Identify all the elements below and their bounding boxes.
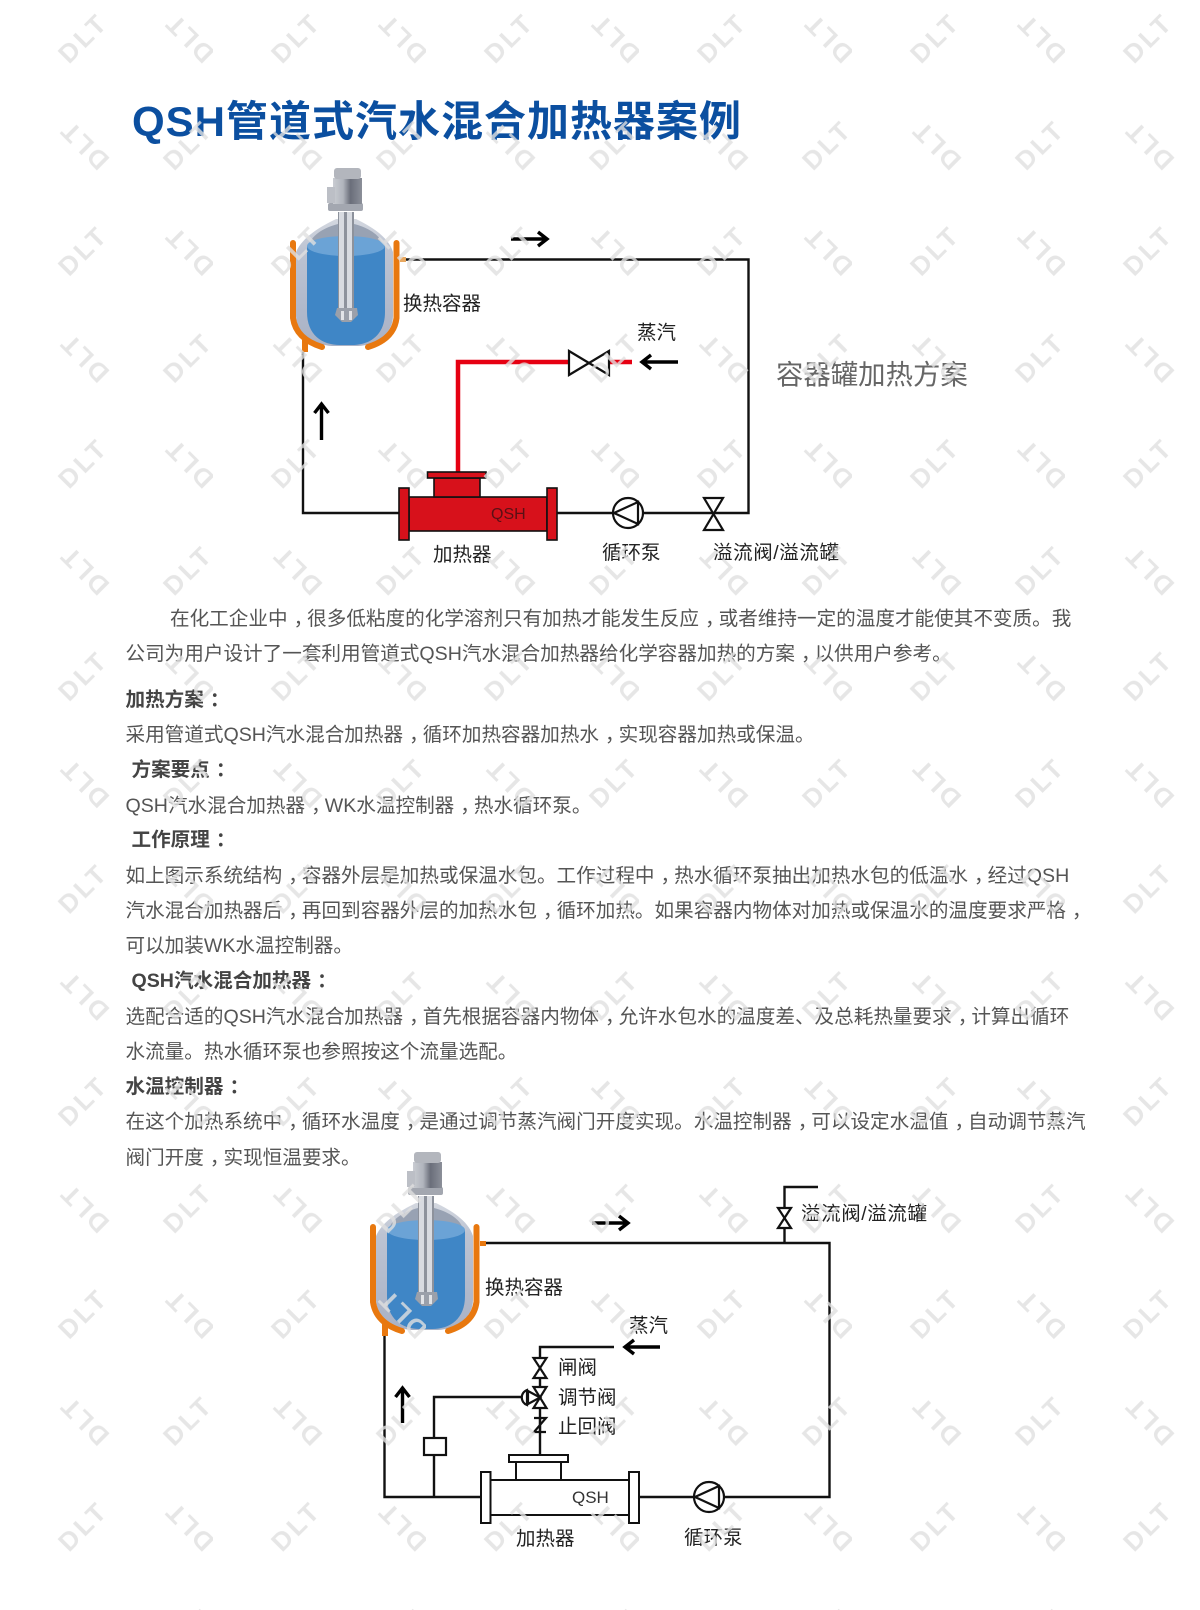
diagram: vessel heating scheme with red heater bbox=[293, 168, 839, 566]
intro paragraph bbox=[126, 608, 1071, 665]
heading: temperature controller: 水温控制器 ： bbox=[126, 1075, 249, 1098]
icon: heat exchange vessel bbox=[293, 168, 406, 352]
circulation pump bbox=[613, 498, 643, 528]
arrow: steam flow left bbox=[625, 1340, 660, 1354]
label: overflow valve: 溢流阀/溢流罐 bbox=[801, 1203, 927, 1225]
intro paragraph: 公司为用户设计了一套利用管道式QSH汽水混合加热器给化学容器加热的方案 ，以供用户参考。 bbox=[126, 643, 952, 665]
pipes: circulation loop bbox=[384, 1243, 830, 1497]
steam valve bbox=[569, 351, 609, 375]
text: QSH heater: 水流量。热水循环泵也参照按这个流量选配。 bbox=[126, 1041, 517, 1063]
heading: key points: 方案要点 ： bbox=[132, 758, 235, 781]
red steam pipe bbox=[458, 362, 632, 472]
regulating valve bbox=[522, 1387, 546, 1408]
overflow valve bbox=[778, 1208, 791, 1228]
label: check valve: 止回阀 bbox=[558, 1416, 617, 1438]
icon: heat exchange vessel bbox=[373, 1152, 486, 1336]
pipes: steam, controller and overflow lines bbox=[434, 1187, 818, 1497]
label: heater: 加热器 bbox=[516, 1528, 575, 1550]
text: QSH heater bbox=[126, 1006, 1069, 1063]
heater label QSH: QSH bbox=[572, 1488, 609, 1507]
check valve bbox=[534, 1418, 546, 1432]
heater QSH, outline bbox=[481, 1455, 639, 1523]
heater label QSH: QSH bbox=[491, 506, 526, 523]
arrow: top flow right bbox=[511, 232, 547, 246]
label: regulating valve: 调节阀 bbox=[558, 1387, 617, 1409]
text: QSH heater: 选配合适的QSH汽水混合加热器 ，首先根据容器内物体 ，允许水包水的温度差、及总耗热量要求 ，计算出循环 bbox=[126, 1006, 1069, 1028]
text: temperature controller: 阀门开度 ，实现恒温要求。 bbox=[126, 1147, 361, 1169]
text: heating scheme: 采用管道式QSH汽水混合加热器 ，循环加热容器加热水 ，实现容器加热或保温。 bbox=[126, 724, 815, 746]
text: working principle bbox=[126, 865, 1092, 957]
diagram: control scheme with temperature controller bbox=[373, 1152, 927, 1550]
label: pump: 循环泵 bbox=[684, 1527, 743, 1549]
label: gate valve: 闸阀 bbox=[558, 1357, 597, 1379]
label: overflow valve: 溢流阀/溢流罐 bbox=[713, 542, 839, 564]
text: temperature controller: 在这个加热系统中 ，循环水温度 ，是通过调节蒸汽阀门开度实现。水温控制器 ，可以设定水温值 ，自动调节蒸汽 bbox=[126, 1111, 1086, 1133]
label: heater: 加热器 bbox=[433, 544, 492, 566]
arrow: return flow up bbox=[396, 1388, 410, 1423]
text: working principle: 汽水混合加热器后 ，再回到容器外层的加热水包 ，循环加热。如果容器内物体对加热或保温水的温度要求严格 ， bbox=[126, 900, 1092, 922]
heater QSH, red bbox=[399, 472, 557, 540]
arrow: return flow up bbox=[314, 404, 328, 440]
scheme caption: 容器罐加热方案 bbox=[776, 359, 968, 390]
body text block bbox=[126, 608, 1092, 1169]
title: QSH管道式汽水混合加热器案例 bbox=[132, 98, 742, 145]
label: steam: 蒸汽 bbox=[629, 1315, 668, 1337]
label: vessel: 换热容器 bbox=[403, 293, 481, 315]
label: steam: 蒸汽 bbox=[637, 322, 676, 344]
text: temperature controller bbox=[126, 1111, 1086, 1169]
arrow: top flow right bbox=[592, 1216, 628, 1230]
arrow: steam flow left bbox=[642, 355, 678, 369]
label: vessel: 换热容器 bbox=[485, 1277, 563, 1299]
gate valve bbox=[534, 1358, 546, 1378]
circulation pump bbox=[694, 1482, 724, 1512]
text: working principle: 可以加装WK水温控制器。 bbox=[126, 935, 353, 957]
intro paragraph: 在化工企业中 ，很多低粘度的化学溶剂只有加热才能发生反应 ，或者维持一定的温度才能使其不变质。我 bbox=[170, 608, 1071, 630]
heading: working principle: 工作原理 ： bbox=[132, 829, 235, 851]
pipes: circulation loop bbox=[303, 260, 748, 513]
label: pump: 循环泵 bbox=[602, 542, 661, 564]
text: working principle: 如上图示系统结构 ，容器外层是加热或保温水包。工作过程中 ，热水循环泵抽出加热水包的低温水 ，经过QSH bbox=[126, 865, 1069, 887]
controller box bbox=[424, 1438, 446, 1455]
heading: QSH heater: QSH汽水混合加热器 ： bbox=[132, 970, 337, 992]
overflow valve bbox=[704, 498, 723, 530]
heading: heating scheme: 加热方案 ： bbox=[126, 688, 229, 711]
text: key points: QSH汽水混合加热器 ，WK水温控制器 ，热水循环泵。 bbox=[126, 795, 591, 817]
